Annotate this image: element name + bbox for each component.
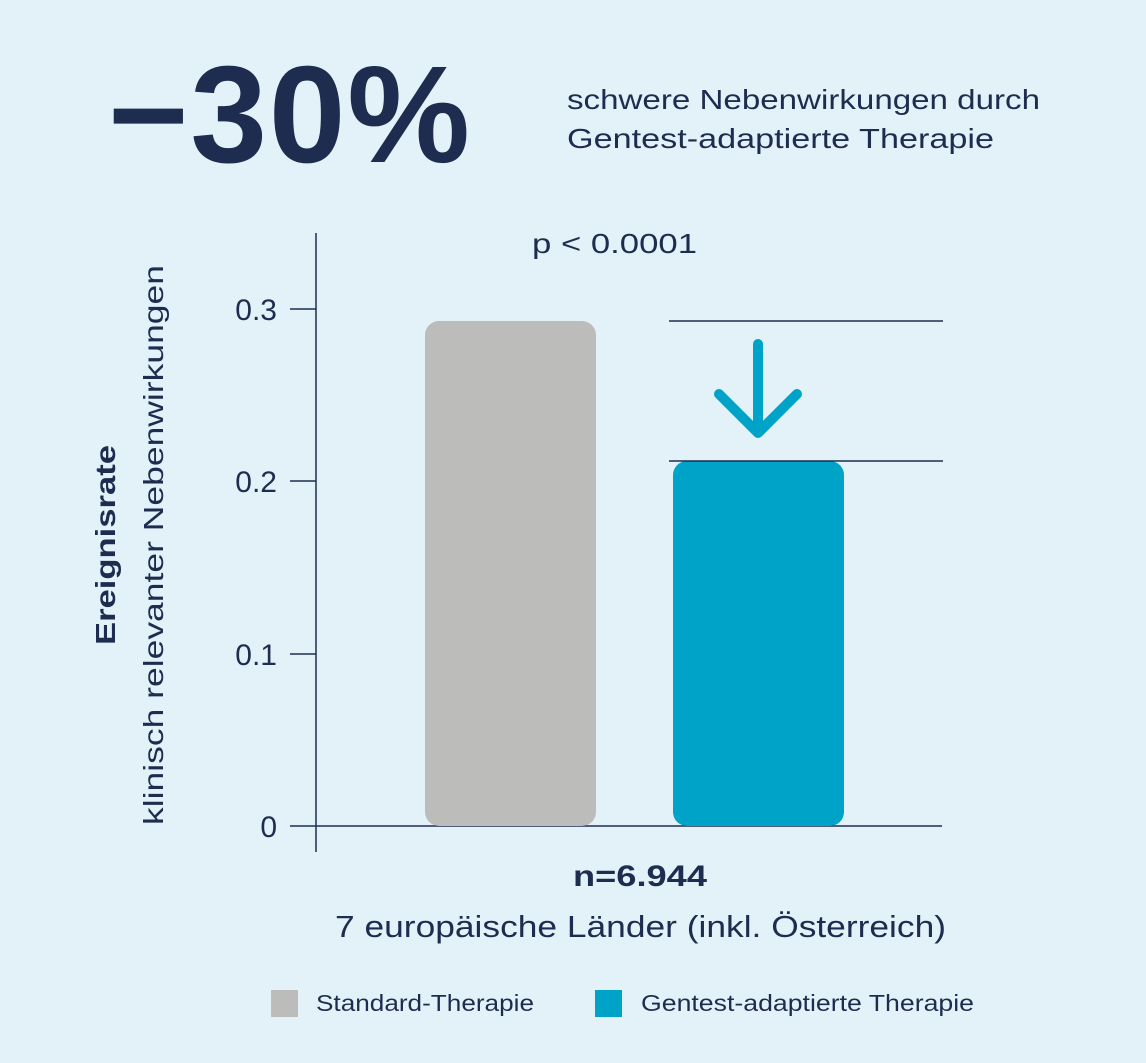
legend: Standard-Therapie <box>316 990 534 1016</box>
bar: gene-test adapted therapy <box>673 461 844 826</box>
y tick labels: 0.2 <box>235 466 277 499</box>
y tick labels: 0.3 <box>235 294 277 327</box>
subtitle text <box>567 84 1040 154</box>
icon: down arrow <box>719 344 797 433</box>
p value: p < 0.0001 <box>532 228 697 259</box>
y axis title: klinisch relevanter Nebenwirkungen <box>138 265 169 825</box>
y axis title <box>90 265 169 825</box>
y axis <box>290 233 942 852</box>
y tick labels: 0.1 <box>235 639 277 672</box>
subtitle text: schwere Nebenwirkungen durch <box>567 84 1040 115</box>
title: -30%: −30% <box>108 38 470 192</box>
legend: Gentest-adaptierte Therapie <box>641 990 974 1016</box>
legend <box>271 990 974 1017</box>
bar: standard therapy <box>425 321 596 826</box>
reference lines <box>669 321 943 461</box>
y axis title: Ereignisrate <box>90 445 121 645</box>
countries caption: 7 europäische Länder (inkl. Österreich) <box>335 909 946 944</box>
y tick labels <box>235 294 277 844</box>
subtitle text: Gentest-adaptierte Therapie <box>567 123 994 154</box>
sample size: n=6.944 <box>573 860 707 893</box>
y tick labels: 0 <box>260 811 277 844</box>
